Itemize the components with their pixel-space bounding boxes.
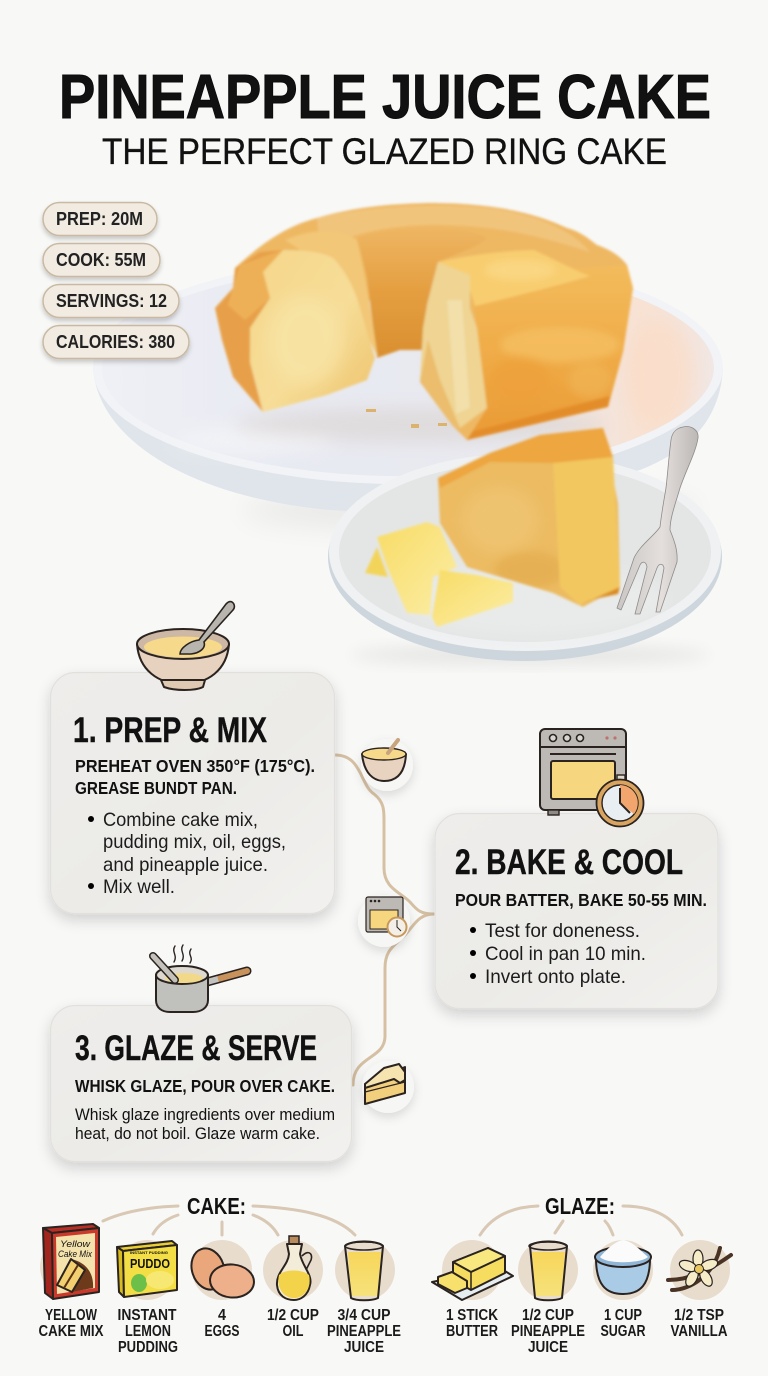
glaze heading: GLAZE: xyxy=(545,1193,615,1219)
cake heading: CAKE: xyxy=(187,1193,246,1219)
pill: servings xyxy=(43,284,179,318)
step 1 heading: 1. PREP & MIX xyxy=(73,711,268,750)
icon: saucepan with steam xyxy=(153,945,247,1012)
ingredient: sugar bowl xyxy=(593,1240,653,1300)
glaze ingredient labels: 1/2 TSP xyxy=(674,1307,724,1324)
pill: cook: COOK: 55M xyxy=(56,250,146,270)
ingredient: instant lemon pudding: PUDDO xyxy=(130,1256,170,1271)
ingredient: pineapple juice glass xyxy=(518,1240,578,1300)
step 2 bullets xyxy=(470,920,646,988)
cake ingredient labels: 3/4 CUP xyxy=(338,1307,390,1324)
crumbs xyxy=(366,409,447,428)
glaze ingredient labels: 1/2 CUP xyxy=(522,1307,574,1324)
section: glaze ingredients xyxy=(432,1193,731,1356)
glaze ingredient labels: 1 CUP xyxy=(604,1307,642,1324)
step 1 bullets: Mix well. xyxy=(103,876,175,898)
cake ingredient labels: 1/2 CUP xyxy=(267,1307,319,1324)
pill: calories xyxy=(43,326,189,358)
step 2 bullets: Invert onto plate. xyxy=(485,966,626,988)
cake ingredient labels: CAKE MIX xyxy=(38,1323,104,1340)
step 1 bullets xyxy=(88,809,286,898)
step 1 bullets: and pineapple juice. xyxy=(103,854,268,876)
step 1 bullets: Combine cake mix, xyxy=(103,809,258,831)
ingredient: instant lemon pudding xyxy=(117,1240,177,1300)
pill: cook xyxy=(43,244,160,276)
icon: oven with timer xyxy=(540,729,644,826)
ingredient: instant lemon pudding: INSTANT PUDDING xyxy=(130,1250,168,1255)
pill: prep xyxy=(43,202,157,236)
section: cake ingredients xyxy=(38,1193,401,1356)
ingredient: butter xyxy=(432,1240,513,1300)
ingredient: yellow cake mix xyxy=(40,1224,100,1299)
ingredient: pineapple juice glass xyxy=(335,1240,395,1300)
step 1 subheading: GREASE BUNDT PAN. xyxy=(75,778,237,798)
pill: calories: CALORIES: 380 xyxy=(56,332,175,352)
step 3 body: heat, do not boil. Glaze warm cake. xyxy=(75,1124,320,1143)
cake ingredient labels: JUICE xyxy=(344,1339,384,1356)
stat pills xyxy=(43,202,189,358)
step 2 bullets: Cool in pan 10 min. xyxy=(485,943,646,965)
ingredient: vanilla xyxy=(668,1240,731,1300)
pill: prep: PREP: 20M xyxy=(56,209,143,229)
panel: step 3 glaze and serve xyxy=(50,945,352,1162)
panel: step 1 prep and mix xyxy=(50,602,334,914)
fork xyxy=(617,427,698,614)
step 2 bullets: Test for doneness. xyxy=(485,920,640,942)
glaze ingredient labels: BUTTER xyxy=(446,1323,498,1340)
step 2 heading: 2. BAKE & COOL xyxy=(455,843,683,882)
large plate xyxy=(95,282,723,526)
step 2 subheading: POUR BATTER, BAKE 50-55 MIN. xyxy=(455,890,707,910)
cake ingredient labels: YELLOW xyxy=(45,1307,97,1324)
panel: step 2 bake and cool xyxy=(435,729,718,1008)
ingredient: oil bottle xyxy=(263,1236,323,1300)
cake ingredient labels: INSTANT xyxy=(118,1307,177,1324)
cake ingredient labels: EGGS xyxy=(204,1323,240,1340)
step 3 body: Whisk glaze ingredients over medium xyxy=(75,1105,335,1124)
slice of cake xyxy=(438,428,620,607)
subtitle: THE PERFECT GLAZED RING CAKE xyxy=(102,130,667,172)
step 1 subheading xyxy=(75,756,315,798)
hero photo: glazed ring cake on plates xyxy=(93,203,723,665)
pineapple chunks xyxy=(365,522,513,627)
cake ingredient labels: 4 xyxy=(218,1307,226,1324)
small plate xyxy=(328,453,722,665)
pill: servings: SERVINGS: 12 xyxy=(56,291,167,311)
step 3 subheading: WHISK GLAZE, POUR OVER CAKE. xyxy=(75,1076,335,1096)
step 3 body xyxy=(75,1105,335,1143)
timeline icon: cake slice xyxy=(362,1061,414,1113)
cake ingredient labels xyxy=(38,1307,401,1356)
ingredient: yellow cake mix: Cake Mix xyxy=(58,1249,92,1259)
timeline icon: small bowl xyxy=(361,739,413,791)
glaze ingredient labels: VANILLA xyxy=(670,1323,728,1340)
cake ingredient labels: PUDDING xyxy=(118,1339,178,1356)
ingredient: yellow cake mix: Yellow xyxy=(60,1239,91,1249)
glaze ingredient labels xyxy=(446,1307,728,1356)
glaze ingredient labels: SUGAR xyxy=(600,1323,646,1340)
glaze ingredient labels: PINEAPPLE xyxy=(511,1323,585,1340)
glaze ingredient labels: JUICE xyxy=(528,1339,568,1356)
ingredient: eggs xyxy=(186,1240,255,1300)
glaze connector arcs xyxy=(480,1206,682,1235)
timeline icon: small oven xyxy=(358,895,410,947)
cake ingredient labels: LEMON xyxy=(125,1323,171,1340)
glaze ingredient labels: 1 STICK xyxy=(446,1307,499,1324)
step 1 bullets: pudding mix, oil, eggs, xyxy=(103,831,286,853)
cake ingredient labels: OIL xyxy=(282,1323,304,1340)
cake ingredient labels: PINEAPPLE xyxy=(327,1323,401,1340)
step 1 subheading: PREHEAT OVEN 350°F (175°C). xyxy=(75,756,315,776)
icon: mixing bowl with spoon xyxy=(137,602,234,690)
connector path xyxy=(335,755,434,1085)
cake connector arcs xyxy=(103,1206,355,1235)
step 3 heading: 3. GLAZE & SERVE xyxy=(75,1029,317,1068)
ring cake xyxy=(215,203,633,443)
